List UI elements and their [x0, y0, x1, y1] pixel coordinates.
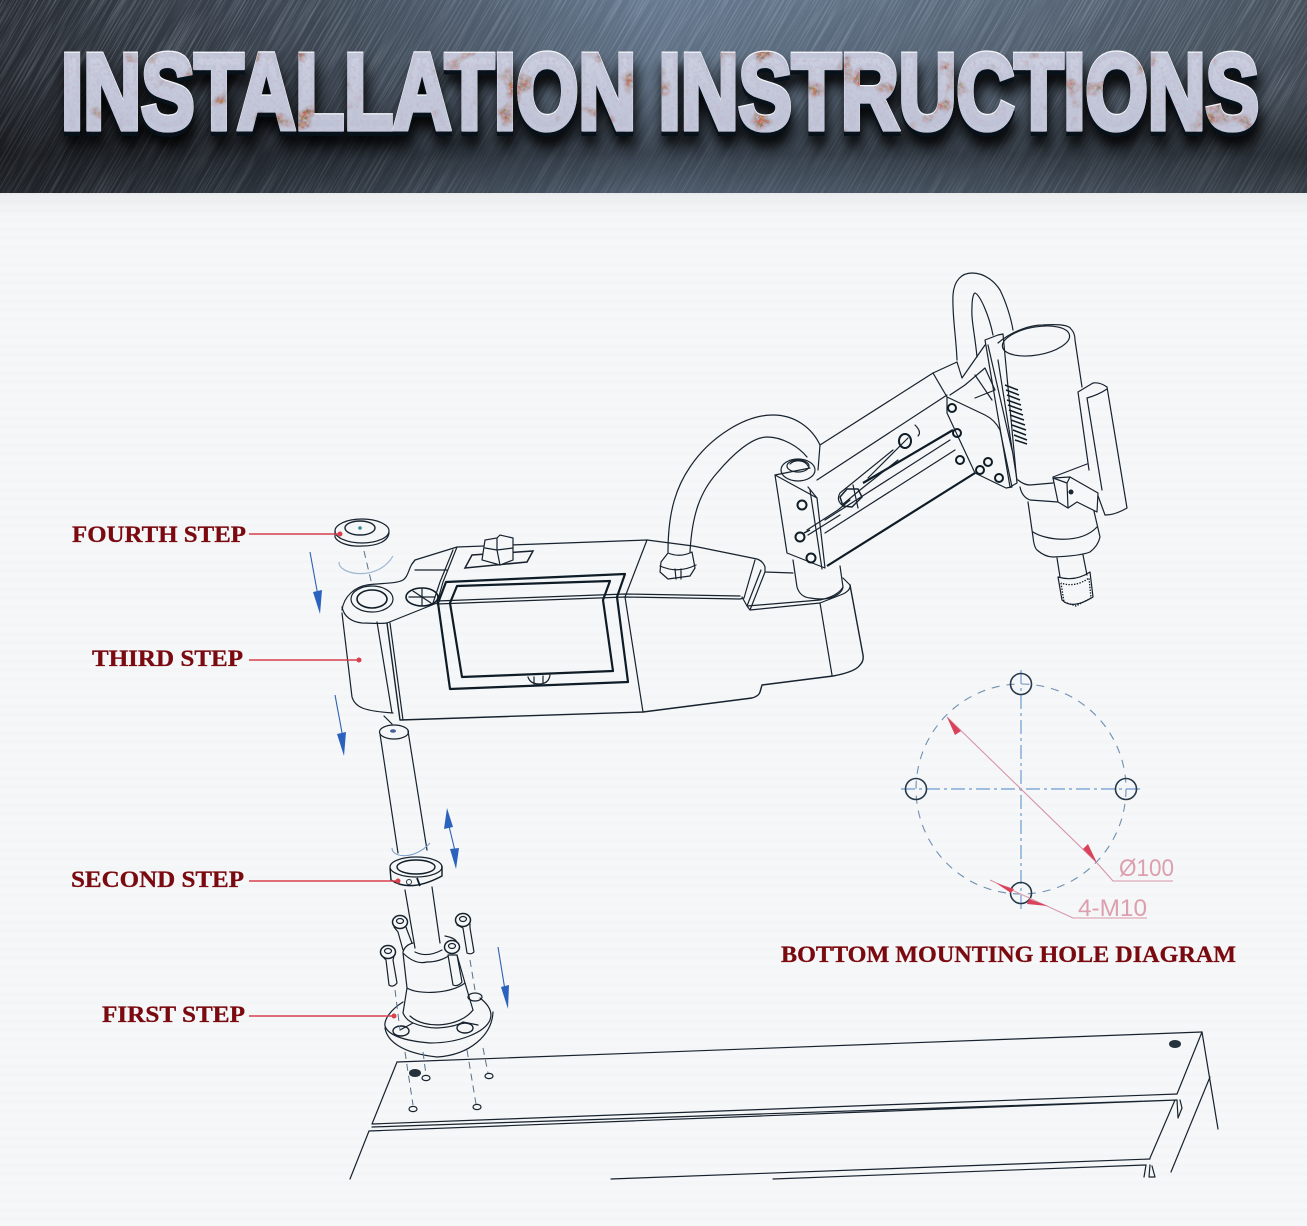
table [350, 960, 1218, 1179]
column hole and knob [351, 586, 438, 612]
U handle [953, 273, 1013, 360]
label: first step [102, 1002, 396, 1027]
bolts [380, 914, 474, 986]
mounting holes [906, 674, 1136, 904]
switch [465, 535, 533, 568]
diagram caption: BOTTOM MOUNTING HOLE DIAGRAM [781, 942, 1236, 967]
label: fourth step: FOURTH STEP [72, 522, 246, 547]
label: third step: THIRD STEP [92, 646, 243, 671]
post [380, 716, 440, 948]
thread dimension [990, 880, 1147, 922]
window on body [438, 574, 628, 689]
diameter dimension: Ø100 [1119, 855, 1174, 882]
second step: collar [390, 843, 442, 886]
label: third step [92, 646, 362, 671]
thread dimension: 4-M10 [1078, 895, 1147, 922]
label: second step: SECOND STEP [71, 867, 244, 892]
diameter dimension [947, 717, 1174, 882]
assembly arrows [310, 552, 509, 1009]
upper arm [775, 362, 975, 569]
label: first step: FIRST STEP [102, 1002, 245, 1027]
fourth step: cap and rotation [335, 519, 393, 585]
label: fourth step [72, 522, 342, 547]
motor [985, 321, 1100, 606]
hose and nut [660, 415, 820, 579]
side handle [1053, 383, 1127, 515]
column under arm [793, 560, 843, 599]
bottom mounting hole diagram [901, 670, 1174, 922]
first step: base flange and bolts [380, 914, 493, 1057]
head bracket [933, 345, 1012, 488]
machine arm: main body [342, 535, 863, 720]
cooling fins [1005, 385, 1027, 444]
header banner: brushed steel [0, 0, 1307, 193]
label: second step [71, 867, 400, 892]
